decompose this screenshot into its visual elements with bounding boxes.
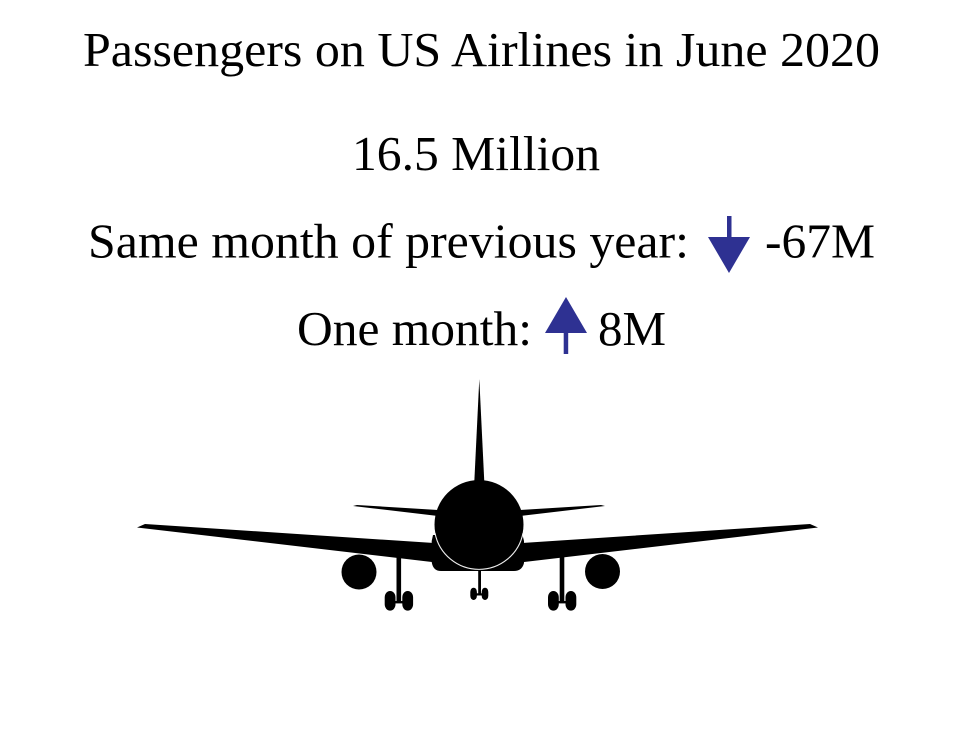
comparison: one month: One month: <box>297 301 532 356</box>
belly fairing <box>432 535 524 571</box>
icon: up arrow <box>545 297 587 354</box>
left engine <box>342 554 376 590</box>
fuselage <box>434 480 524 569</box>
value: 8M: 8M <box>598 301 666 356</box>
comparison: same month of previous year: Same month of previous year: <box>88 214 689 268</box>
icon: down arrow <box>708 216 750 273</box>
icon: airplane front view <box>137 379 818 611</box>
comparison: one month <box>297 297 666 356</box>
value: -67M: -67M <box>765 214 875 268</box>
title: Passengers on US Airlines in June 2020 <box>83 22 880 77</box>
right engine <box>585 554 620 589</box>
main figure: 16.5 Million: 16.5 Million <box>352 126 600 181</box>
nose landing gear <box>470 570 488 600</box>
tail fin <box>474 379 484 484</box>
right landing gear <box>548 556 576 611</box>
left landing gear <box>385 556 413 611</box>
tailplane <box>353 505 605 516</box>
comparison: same month of previous year <box>88 214 875 273</box>
wings <box>137 524 818 562</box>
